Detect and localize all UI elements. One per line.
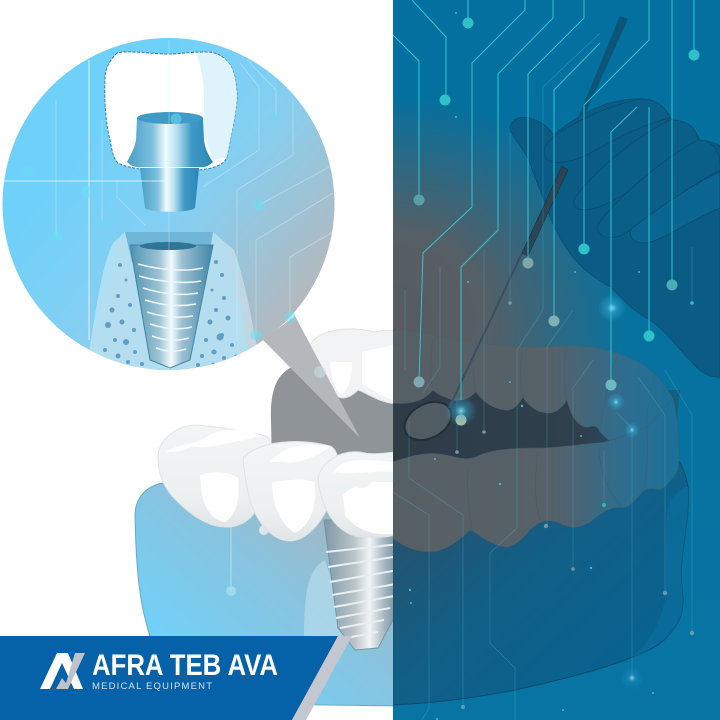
- lower teeth dark: [393, 397, 679, 552]
- handle upper: [577, 16, 628, 120]
- left illustration: teeth and gum: [135, 329, 400, 706]
- replacement crown: [105, 52, 237, 170]
- gum collar: [125, 232, 213, 262]
- small sparkles: [409, 12, 654, 720]
- circle implant screw: [130, 242, 213, 368]
- brand name: AFRA TEB AVA: [92, 649, 278, 682]
- logo mark: [40, 653, 85, 689]
- right dark panel: [393, 0, 720, 720]
- hand finger folds: [544, 99, 720, 243]
- gum circuit trace: [226, 526, 268, 596]
- lower implant screw: [324, 520, 400, 650]
- small nodes: [455, 301, 694, 709]
- tooth cusps: [166, 430, 393, 473]
- upper teeth dark: [393, 330, 673, 449]
- circuit lines faint: [393, 33, 692, 720]
- handle knurled: [522, 166, 568, 256]
- gloved hand: [510, 99, 720, 377]
- logo banner: [0, 636, 352, 720]
- upper tooth highlight: [330, 345, 393, 400]
- circuit lines bright: [393, 0, 694, 400]
- mouth interior: [270, 368, 393, 455]
- callout pointer: [263, 316, 360, 438]
- abutment screw: [140, 168, 199, 212]
- abutment top: [137, 112, 203, 124]
- lower tooth divides: [467, 428, 647, 530]
- magnified circle: [2, 38, 360, 438]
- circle circuit nodes: [23, 112, 326, 378]
- circuit nodes: [414, 18, 700, 426]
- lower molar 2: [243, 442, 338, 541]
- bone: [100, 275, 248, 370]
- abutment head: [127, 118, 213, 167]
- lower molar 1: [158, 425, 272, 527]
- bone halo: [89, 232, 256, 355]
- tooth enamel highlights: [200, 472, 393, 534]
- upper tooth divides: [430, 338, 656, 432]
- mirror: [398, 253, 522, 448]
- mouth interior dark: [393, 390, 680, 462]
- banner blue: [0, 636, 338, 720]
- bone pores: [103, 260, 238, 367]
- banner grey sliver: [292, 636, 352, 720]
- lower gum dark: [393, 440, 688, 705]
- crown shading: [196, 53, 237, 160]
- lower molar 3: [318, 452, 400, 537]
- tagline: MEDICAL EQUIPMENT: [92, 681, 212, 692]
- gum edge highlight: [633, 487, 688, 657]
- gum highlight: [304, 560, 344, 640]
- upper teeth: [309, 329, 400, 404]
- lower gum: [135, 470, 400, 706]
- glow sparks: [445, 294, 644, 690]
- circle circuit lines: [3, 40, 333, 370]
